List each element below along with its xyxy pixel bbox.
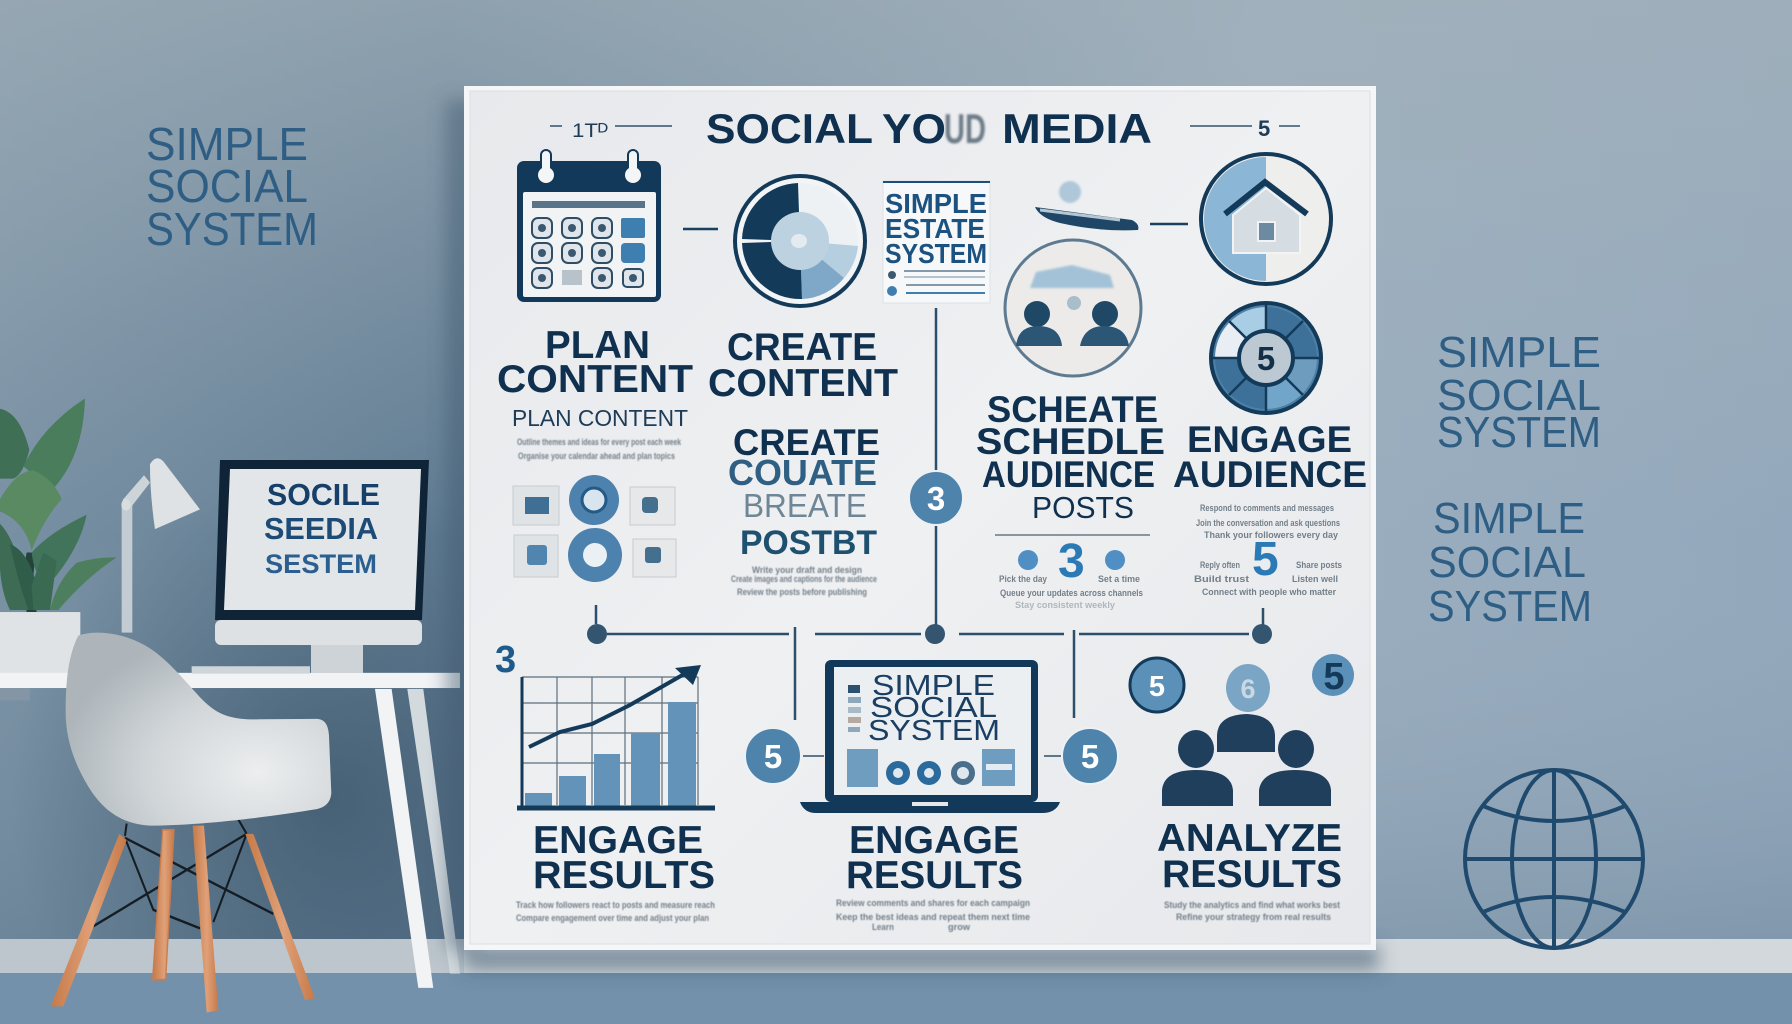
plant	[0, 398, 117, 674]
icon: laptop with screen	[800, 660, 1060, 813]
caption: create posts	[731, 565, 877, 598]
icon: analytics people and badges	[1130, 654, 1354, 806]
step heading: engage results middle: RESULTS	[846, 854, 1023, 897]
badge: number 5 left: 5	[764, 738, 782, 775]
wall label left: simple social system: SOCIAL	[146, 160, 308, 212]
detail: schedule posts	[995, 535, 1150, 611]
caption: plan content: Outline themes and ideas for every post each week	[517, 437, 682, 448]
wall label right top: simple social system	[1437, 328, 1601, 457]
caption: engage results middle: grow	[948, 922, 971, 933]
icon: analytics people and badges: 6	[1240, 674, 1256, 704]
wall label right bottom: simple social system	[1428, 494, 1592, 631]
step heading: analyze results: ANALYZE	[1157, 817, 1342, 860]
number 3 marker: 3	[495, 639, 516, 681]
caption: create posts: Write your draft and design	[752, 565, 862, 576]
panel: infographic board	[464, 86, 1376, 950]
caption: engage results left: Compare engagement over time and adjust your plan	[516, 913, 709, 924]
caption: engage results middle: Learn	[872, 922, 894, 933]
detail: engage audience: Share posts	[1296, 560, 1342, 571]
step heading: schedule audience posts: POSTS	[1032, 490, 1134, 525]
icon: pen and pin	[1035, 181, 1188, 230]
caption: engage results left: Track how followers react to posts and measure reach	[516, 900, 715, 911]
monitor	[215, 460, 429, 673]
title	[706, 105, 1152, 152]
wall label right top: simple social system: SOCIAL	[1437, 371, 1601, 420]
timeline node dots	[587, 624, 1272, 644]
step heading: engage results middle: ENGAGE	[849, 819, 1019, 862]
wall label right top: simple social system: SIMPLE	[1437, 328, 1601, 377]
desk	[0, 666, 460, 988]
icon: analytics people and badges: 5	[1149, 671, 1165, 703]
step heading: plan content: CONTENT	[497, 358, 693, 401]
step marker left: 1Tᴰ	[572, 121, 609, 142]
caption: create posts: Create images and captions for the audience	[731, 574, 877, 585]
icon: document card: SYSTEM	[885, 238, 987, 269]
icon: pie chart	[735, 176, 865, 306]
step heading: analyze results	[1157, 817, 1342, 896]
board shadow	[446, 100, 1379, 971]
icon: globe	[1465, 770, 1643, 948]
step heading: engage audience	[1173, 419, 1367, 495]
detail: engage audience: Build trust	[1194, 574, 1250, 585]
step heading: engage audience: AUDIENCE	[1173, 454, 1367, 495]
wall label left: simple social system: SYSTEM	[146, 203, 318, 255]
wall label right bottom: simple social system: SIMPLE	[1433, 494, 1585, 543]
step marker left	[550, 121, 672, 142]
wall label left: simple social system: SIMPLE	[146, 118, 308, 170]
caption: plan content	[517, 437, 682, 462]
step heading: create posts stack	[728, 422, 880, 562]
step heading: analyze results: RESULTS	[1162, 853, 1342, 896]
step heading: schedule audience posts: SCHEATE	[987, 389, 1158, 430]
caption: engage results middle: Keep the best ideas and repeat them next time	[836, 912, 1030, 923]
step heading: engage results left	[533, 819, 715, 897]
wall label right bottom: simple social system: SOCIAL	[1428, 538, 1586, 587]
bar chart with rising arrow	[517, 665, 715, 808]
badge: number 5 left	[745, 728, 801, 784]
detail: schedule posts: Set a time	[1098, 574, 1140, 585]
caption: analyze results: Refine your strategy from real results	[1176, 912, 1331, 923]
detail: engage audience: Respond to comments and messages	[1200, 503, 1334, 514]
caption: engage results left	[516, 900, 715, 924]
detail: schedule posts: Queue your updates across channels	[1000, 588, 1143, 599]
icon: laptop with screen: SOCIAL	[870, 692, 997, 724]
wall label right top: simple social system: SYSTEM	[1437, 408, 1601, 457]
icon: dial with number 5: 5	[1257, 340, 1275, 377]
badge: number 5 right	[1062, 728, 1118, 784]
step heading: create posts stack: BREATE	[743, 487, 867, 524]
icon: calendar	[517, 150, 661, 302]
step heading: schedule audience posts: AUDIENCE	[982, 454, 1155, 495]
detail: engage audience: Listen well	[1292, 574, 1338, 585]
step heading: engage results middle	[846, 819, 1023, 897]
step heading: create content	[708, 326, 898, 405]
caption: create posts: Review the posts before publishing	[737, 587, 867, 598]
icon: dial with number 5	[1211, 303, 1321, 413]
subheading: plan content: PLAN CONTENT	[512, 405, 688, 431]
caption: analyze results: Study the analytics and find what works best	[1164, 900, 1341, 911]
step marker right: 5	[1258, 116, 1270, 141]
detail: engage audience: Join the conversation and ask questions	[1196, 518, 1340, 529]
title: SOCIAL	[706, 105, 873, 152]
badge: number 3: 3	[927, 480, 945, 517]
detail: schedule posts: Pick the day	[999, 574, 1048, 585]
icon: document card: ESTATE	[885, 213, 985, 244]
icon: document card: SIMPLE	[885, 188, 987, 219]
step heading: engage audience: ENGAGE	[1187, 419, 1352, 460]
title: MEDIA	[1002, 105, 1152, 152]
step heading: plan content	[497, 324, 693, 401]
step heading: create content: CONTENT	[708, 362, 898, 405]
step heading: schedule audience posts: SCHEDLE	[976, 421, 1165, 462]
icon: analytics people and badges: 5	[1323, 656, 1345, 698]
icon group: plan tools	[513, 475, 676, 582]
connector: vertical timeline	[596, 308, 1263, 756]
monitor: SESTEM	[265, 549, 377, 579]
detail: engage audience: Reply often	[1200, 560, 1240, 571]
caption: plan content: Organise your calendar ahead and plan topics	[518, 451, 675, 462]
badge: number 5 right: 5	[1081, 738, 1099, 775]
icon: house circle	[1201, 154, 1331, 284]
badge: number 3	[909, 471, 963, 525]
step heading: create posts stack: CREATE	[733, 422, 880, 463]
step heading: plan content: PLAN	[545, 324, 650, 367]
desk lamp	[121, 458, 200, 633]
caption: analyze results	[1164, 900, 1341, 923]
title: YO	[882, 105, 946, 152]
detail: schedule posts: Stay consistent weekly	[1015, 600, 1116, 611]
monitor: SOCILE	[267, 477, 380, 512]
wall label right bottom: simple social system: SYSTEM	[1428, 582, 1592, 631]
chair	[51, 633, 331, 1012]
monitor: SEEDIA	[264, 511, 378, 546]
icon: laptop with screen: SYSTEM	[868, 715, 1000, 747]
detail: engage audience: 5	[1252, 533, 1279, 586]
step heading: engage results left: RESULTS	[533, 854, 715, 897]
wall label left: simple social system	[146, 118, 318, 255]
caption: engage results middle: Review comments and shares for each campaign	[836, 898, 1030, 909]
step marker right	[1190, 116, 1300, 141]
detail: engage audience: Connect with people who matter	[1202, 587, 1336, 598]
detail: engage audience	[1194, 503, 1342, 598]
caption: engage results middle	[836, 898, 1030, 933]
step heading: create content: CREATE	[727, 326, 877, 369]
step heading: create posts stack: POSTBT	[740, 524, 877, 562]
step heading: create posts stack: COUATE	[728, 452, 877, 493]
step heading: engage results left: ENGAGE	[533, 819, 703, 862]
step heading: schedule audience posts	[976, 389, 1165, 525]
detail: engage audience: Thank your followers every day	[1204, 530, 1339, 541]
icon: audience circle	[1005, 240, 1141, 376]
detail: schedule posts: 3	[1058, 535, 1085, 588]
icon: document card	[883, 181, 990, 303]
icon: laptop with screen: SIMPLE	[872, 670, 995, 702]
title: UD	[944, 105, 986, 152]
